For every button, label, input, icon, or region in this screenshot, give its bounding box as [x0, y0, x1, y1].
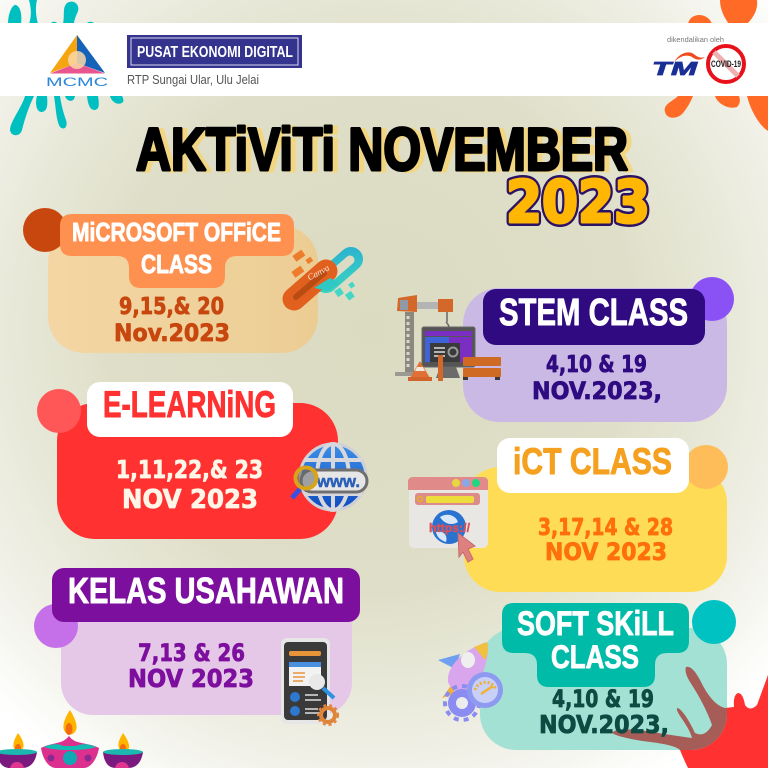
- icon: chain link: [291, 250, 355, 301]
- logo: TM: TM: [652, 59, 699, 79]
- lamp left: [0, 733, 37, 768]
- icon: rocket with gauge and gear: [438, 642, 503, 720]
- paint splat: red: [612, 667, 768, 768]
- year: 2023: [506, 168, 650, 236]
- panel: kelas usahawan: KELAS USAHAWAN: [68, 570, 344, 611]
- panel: soft skill class: [480, 600, 736, 750]
- icon: www globe: www.: [316, 472, 360, 491]
- title: AKTiViTi NOVEMBER: [141, 117, 633, 184]
- panel: soft skill class: 4,10 & 19: [552, 685, 654, 713]
- logo: TM: [652, 52, 705, 79]
- icon: www globe: [292, 444, 367, 510]
- panel: microsoft office class: [23, 208, 318, 353]
- icon: browser window: https://: [429, 521, 471, 535]
- panel: stem class: 4,10 & 19: [546, 352, 647, 378]
- year: 2023: [506, 168, 650, 236]
- logo: Pusat Ekonomi Digital: PUSAT EKONOMI DIGITAL: [137, 44, 293, 61]
- panel: soft skill class: SOFT SKiLL: [517, 605, 674, 643]
- panel: kelas usahawan: 7,13 & 26: [138, 639, 245, 667]
- diya lamps: [0, 710, 143, 768]
- panel: soft skill class: NOV.2023,: [539, 710, 669, 739]
- orange paint splat: [665, 0, 768, 131]
- panel: e-learning: E-LEARNiNG: [103, 384, 276, 425]
- logo: Pusat Ekonomi Digital: [127, 35, 302, 68]
- icon: construction crane and monitor: [395, 295, 501, 381]
- panel: ict class: iCT CLASS: [513, 441, 672, 482]
- panel: stem class: NOV.2023,: [532, 377, 662, 405]
- panel: stem class: [463, 277, 734, 422]
- teal paint splat: [8, 0, 123, 135]
- lamp right: [103, 733, 143, 768]
- panel: e-learning: [37, 382, 338, 539]
- panel: microsoft office class: MiCROSOFT OFFiCE: [72, 217, 281, 247]
- panel: ict class: NOV 2023: [545, 538, 667, 566]
- icon: smartphone: [281, 638, 338, 725]
- panel: microsoft office class: Nov.2023: [114, 319, 230, 347]
- header band: [0, 23, 768, 96]
- logo: MCMC: [46, 35, 109, 89]
- icon: no covid-19: [708, 46, 744, 82]
- panel: kelas usahawan: NOV 2023: [128, 664, 254, 693]
- panel: e-learning: 1,11,22,& 23: [116, 455, 263, 484]
- panel: ict class: 3,17,14 & 28: [538, 515, 673, 541]
- panel: ict class: [464, 438, 728, 592]
- icon: chain link: Canva: [306, 262, 332, 282]
- title: AKTiViTi NOVEMBER: [136, 116, 628, 183]
- lamp centre: [41, 710, 99, 768]
- panel: microsoft office class: CLASS: [141, 249, 212, 279]
- panel: microsoft office class: 9,15,& 20: [119, 294, 224, 320]
- panel: kelas usahawan: [34, 568, 360, 715]
- panel: stem class: STEM CLASS: [499, 292, 688, 334]
- logo: MCMC: MCMC: [46, 75, 109, 89]
- panel: soft skill class: CLASS: [551, 639, 639, 675]
- panel: e-learning: NOV 2023: [122, 485, 258, 515]
- location text: RTP Sungai Ular, Ulu Jelai: [127, 72, 259, 87]
- operator note: dikendalikan oleh: [667, 37, 724, 44]
- icon: browser window: [408, 477, 488, 562]
- icon: no covid-19: COVID-19: [711, 59, 741, 69]
